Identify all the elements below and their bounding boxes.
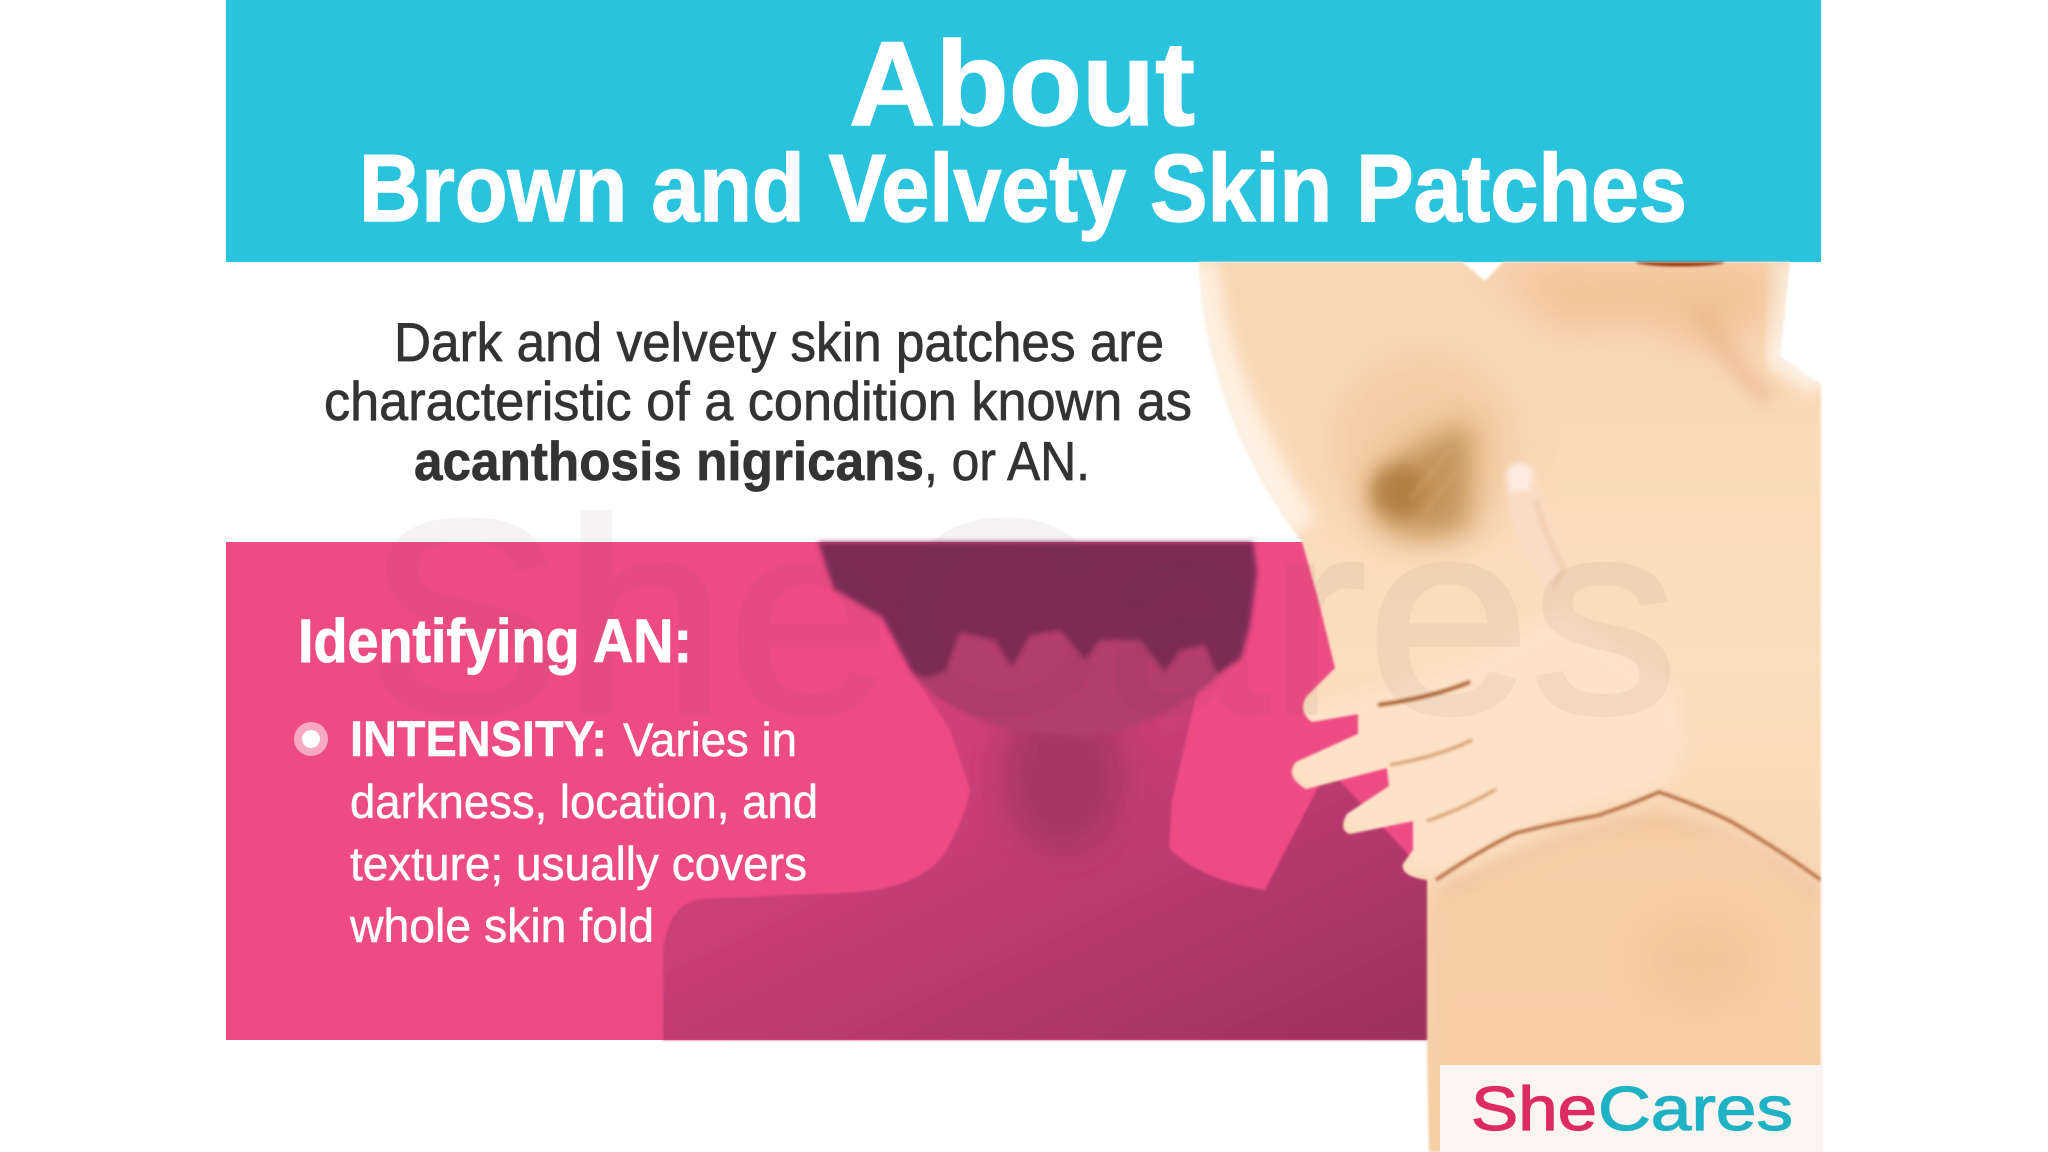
intro paragraph: acanthosis nigricans (414, 430, 924, 492)
bullet text: intensity description: Varies in (623, 713, 797, 766)
skin: chest shading near neck (1490, 262, 1780, 350)
intro paragraph: , or AN. (924, 430, 1090, 492)
skin: underarm shading (1330, 355, 1520, 545)
skin: arm outer highlight (1199, 262, 1300, 530)
intro paragraph (324, 311, 1192, 492)
logo: SheCares: She (1471, 1075, 1597, 1144)
panel: header banner (226, 0, 1821, 262)
photo: woman's back and neck silhouette (663, 542, 1432, 1040)
panel: identifying AN pink background with neck photo (226, 542, 1432, 1040)
skin: right edge highlight (1778, 262, 1821, 385)
bullet text: intensity description: texture; usually covers (350, 837, 807, 890)
crease under breast (1436, 792, 1821, 880)
watermark: SheCares: SheCares (366, 464, 1678, 771)
title: About: About (849, 17, 1195, 151)
subtitle: Brown and Velvety Skin Patches: Brown and Velvety Skin Patches (359, 135, 1687, 242)
skin: collarbone shadow (1700, 310, 1770, 400)
heading: Identifying AN: Identifying AN: (298, 607, 692, 675)
dark velvety underarm patch (1368, 424, 1472, 538)
bullet text: intensity description (349, 711, 818, 952)
logo: SheCares (1440, 1065, 1821, 1152)
thumb (1504, 460, 1556, 572)
skin: lower torso shading (1434, 815, 1817, 1054)
logo: SheCares: Cares (1598, 1075, 1793, 1144)
bullet text: intensity description: darkness, location, and (350, 775, 818, 828)
hair (818, 542, 1257, 678)
intro paragraph: characteristic of a condition known as (324, 370, 1192, 432)
icon: bullet (294, 722, 328, 756)
hand (1291, 610, 1690, 880)
finger creases (1378, 682, 1470, 705)
intro paragraph: Dark and velvety skin patches are (394, 311, 1164, 373)
bullet text: intensity description: whole skin fold (349, 899, 654, 952)
bullet text: intensity description: INTENSITY: (350, 711, 607, 767)
photo: torso with raised arm and hand (1190, 255, 1830, 1152)
top neck red detail (1634, 260, 1726, 268)
